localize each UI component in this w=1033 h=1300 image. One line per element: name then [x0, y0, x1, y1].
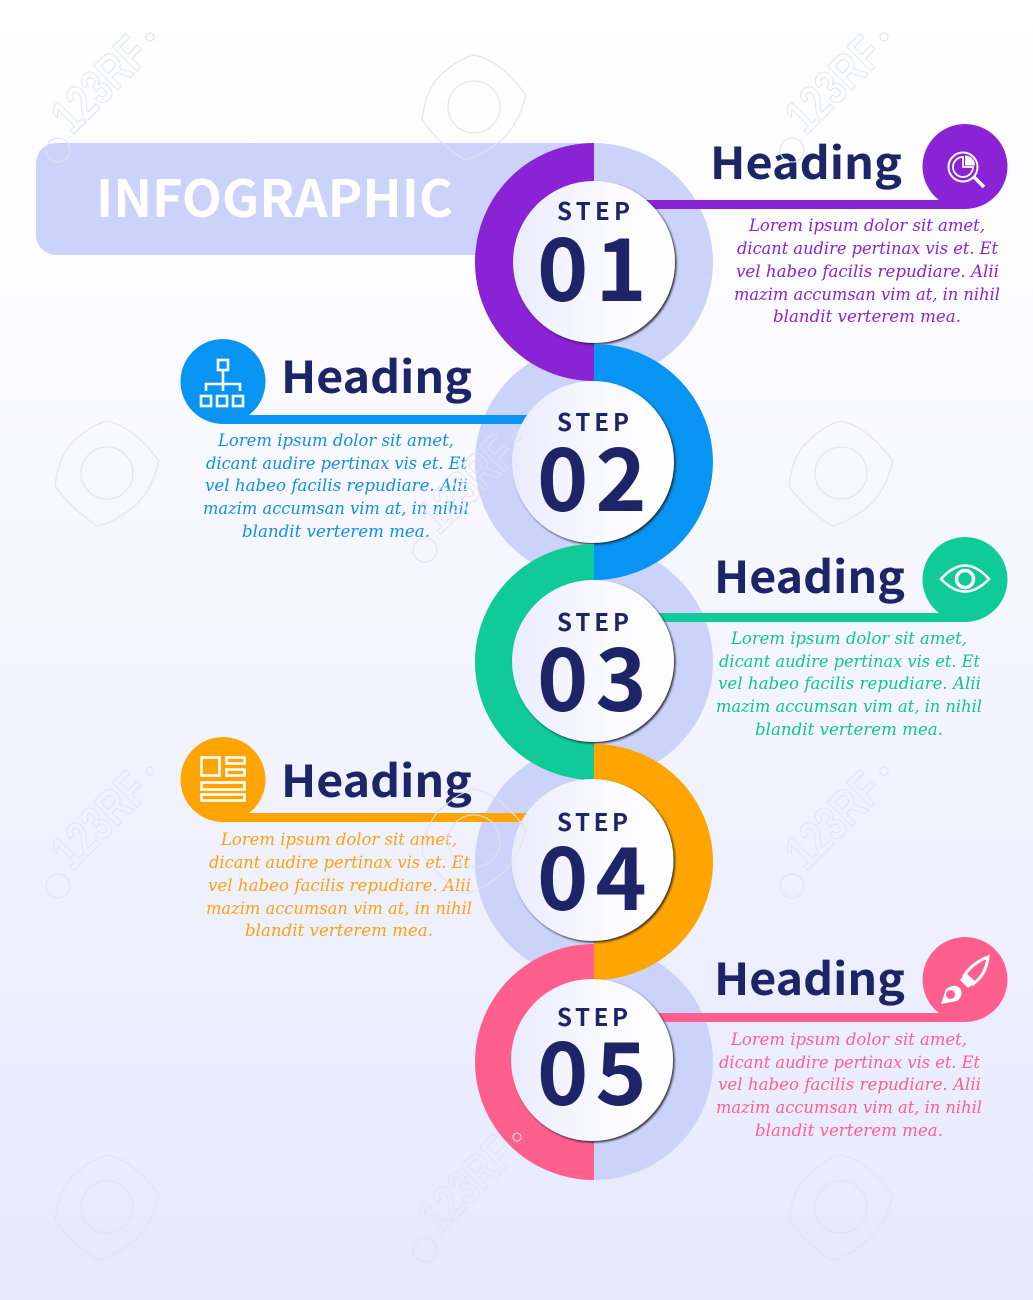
step 4 text: Lorem ipsum dolor sit amet, — [220, 830, 457, 849]
step 1 text: blandit verterem mea. — [773, 307, 961, 326]
step 2 text: vel habeo facilis repudiare. Alii — [205, 476, 468, 495]
step 1 text — [734, 216, 1000, 326]
step 3 heading: Heading — [714, 542, 905, 606]
step 3 badge: STEP — [557, 603, 629, 638]
step 3 text: mazim accumsan vim at, in nihil — [716, 697, 982, 716]
step 5 text — [716, 1030, 982, 1140]
step 5 text: blandit verterem mea. — [755, 1121, 943, 1140]
step 5 text: Lorem ipsum dolor sit amet, — [730, 1030, 967, 1049]
watermarks: 123RF — [407, 425, 526, 544]
step 4 text: dicant audire pertinax vis et. Et — [209, 853, 470, 872]
watermarks: 123RF — [774, 761, 893, 880]
step 2 text: Lorem ipsum dolor sit amet, — [217, 431, 454, 450]
step 1 — [475, 124, 1008, 381]
step 2 — [180, 339, 713, 580]
lavender backing half rings — [475, 143, 713, 1180]
step 4 heading: Heading — [281, 746, 472, 810]
step 4 — [180, 737, 713, 980]
step 1 connector and icon disc — [640, 124, 1008, 209]
step 2 badge: 02 — [537, 411, 654, 537]
step 1 text: mazim accumsan vim at, in nihil — [734, 285, 1000, 304]
step 1 badge: 01 — [537, 201, 654, 327]
step 1 coloured half ring — [475, 143, 594, 381]
step 2 connector and icon disc — [180, 339, 560, 424]
step 2 text: dicant audire pertinax vis et. Et — [206, 454, 467, 473]
step 5 connector and icon disc — [640, 937, 1008, 1022]
step 3 text: dicant audire pertinax vis et. Et — [719, 652, 980, 671]
icon: paint brush — [941, 957, 988, 1004]
step 4 badge: 04 — [537, 810, 654, 936]
step 3 text — [716, 629, 982, 739]
step 4 text: vel habeo facilis repudiare. Alii — [208, 876, 471, 895]
step 4 badge — [512, 779, 674, 941]
step 1 heading: Heading — [710, 128, 902, 192]
step 3 connector and icon disc — [640, 537, 1008, 622]
watermarks: 123RF — [407, 1125, 526, 1244]
step 4 text: mazim accumsan vim at, in nihil — [206, 899, 472, 918]
step 4 badge: STEP — [557, 803, 628, 838]
step 5 badge: 05 — [537, 1005, 654, 1131]
step 5 — [475, 937, 1008, 1180]
step 1 badge — [513, 181, 675, 343]
step 1 text: Lorem ipsum dolor sit amet, — [748, 216, 985, 235]
step 4 text: blandit verterem mea. — [245, 921, 433, 940]
title banner — [36, 143, 594, 255]
step 4 coloured half ring — [594, 744, 713, 980]
step 5 text: dicant audire pertinax vis et. Et — [719, 1053, 980, 1072]
watermarks — [40, 25, 893, 1262]
step 3 — [475, 537, 1008, 780]
icon: eye — [941, 566, 989, 592]
step 5 badge: STEP — [557, 998, 628, 1033]
step 2 badge — [512, 381, 674, 543]
step 5 text: vel habeo facilis repudiare. Alii — [718, 1075, 981, 1094]
step 5 text: mazim accumsan vim at, in nihil — [716, 1098, 982, 1117]
icon: hierarchy — [201, 360, 243, 406]
step 3 text: vel habeo facilis repudiare. Alii — [718, 674, 981, 693]
title: INFOGRAPHIC — [96, 158, 453, 232]
step 3 coloured half ring — [475, 544, 594, 780]
step 2 coloured half ring — [594, 344, 713, 580]
step 1 text: dicant audire pertinax vis et. Et — [737, 239, 998, 258]
icon: magnifier with pie chart — [948, 152, 984, 187]
step 3 text: blandit verterem mea. — [755, 720, 943, 739]
watermarks: 123RF — [40, 25, 159, 144]
step 1 text: vel habeo facilis repudiare. Alii — [736, 262, 999, 281]
icon: newspaper layout — [202, 758, 244, 800]
watermarks: 123RF — [774, 25, 893, 144]
step 3 text: Lorem ipsum dolor sit amet, — [730, 629, 967, 648]
step 1 badge: STEP — [557, 192, 630, 227]
step 2 heading: Heading — [281, 342, 472, 406]
step 4 text — [206, 830, 472, 940]
watermarks: 123RF — [40, 761, 159, 880]
step 5 badge — [511, 979, 673, 1141]
step 3 badge — [512, 580, 674, 742]
step 2 text: mazim accumsan vim at, in nihil — [203, 499, 469, 518]
step 5 heading: Heading — [714, 944, 905, 1008]
step 4 connector and icon disc — [180, 737, 560, 822]
step 5 coloured half ring — [475, 944, 594, 1180]
step 3 badge: 03 — [537, 611, 654, 737]
step 2 text: blandit verterem mea. — [242, 522, 430, 541]
step 2 badge: STEP — [557, 403, 629, 438]
step 2 text — [203, 431, 469, 541]
